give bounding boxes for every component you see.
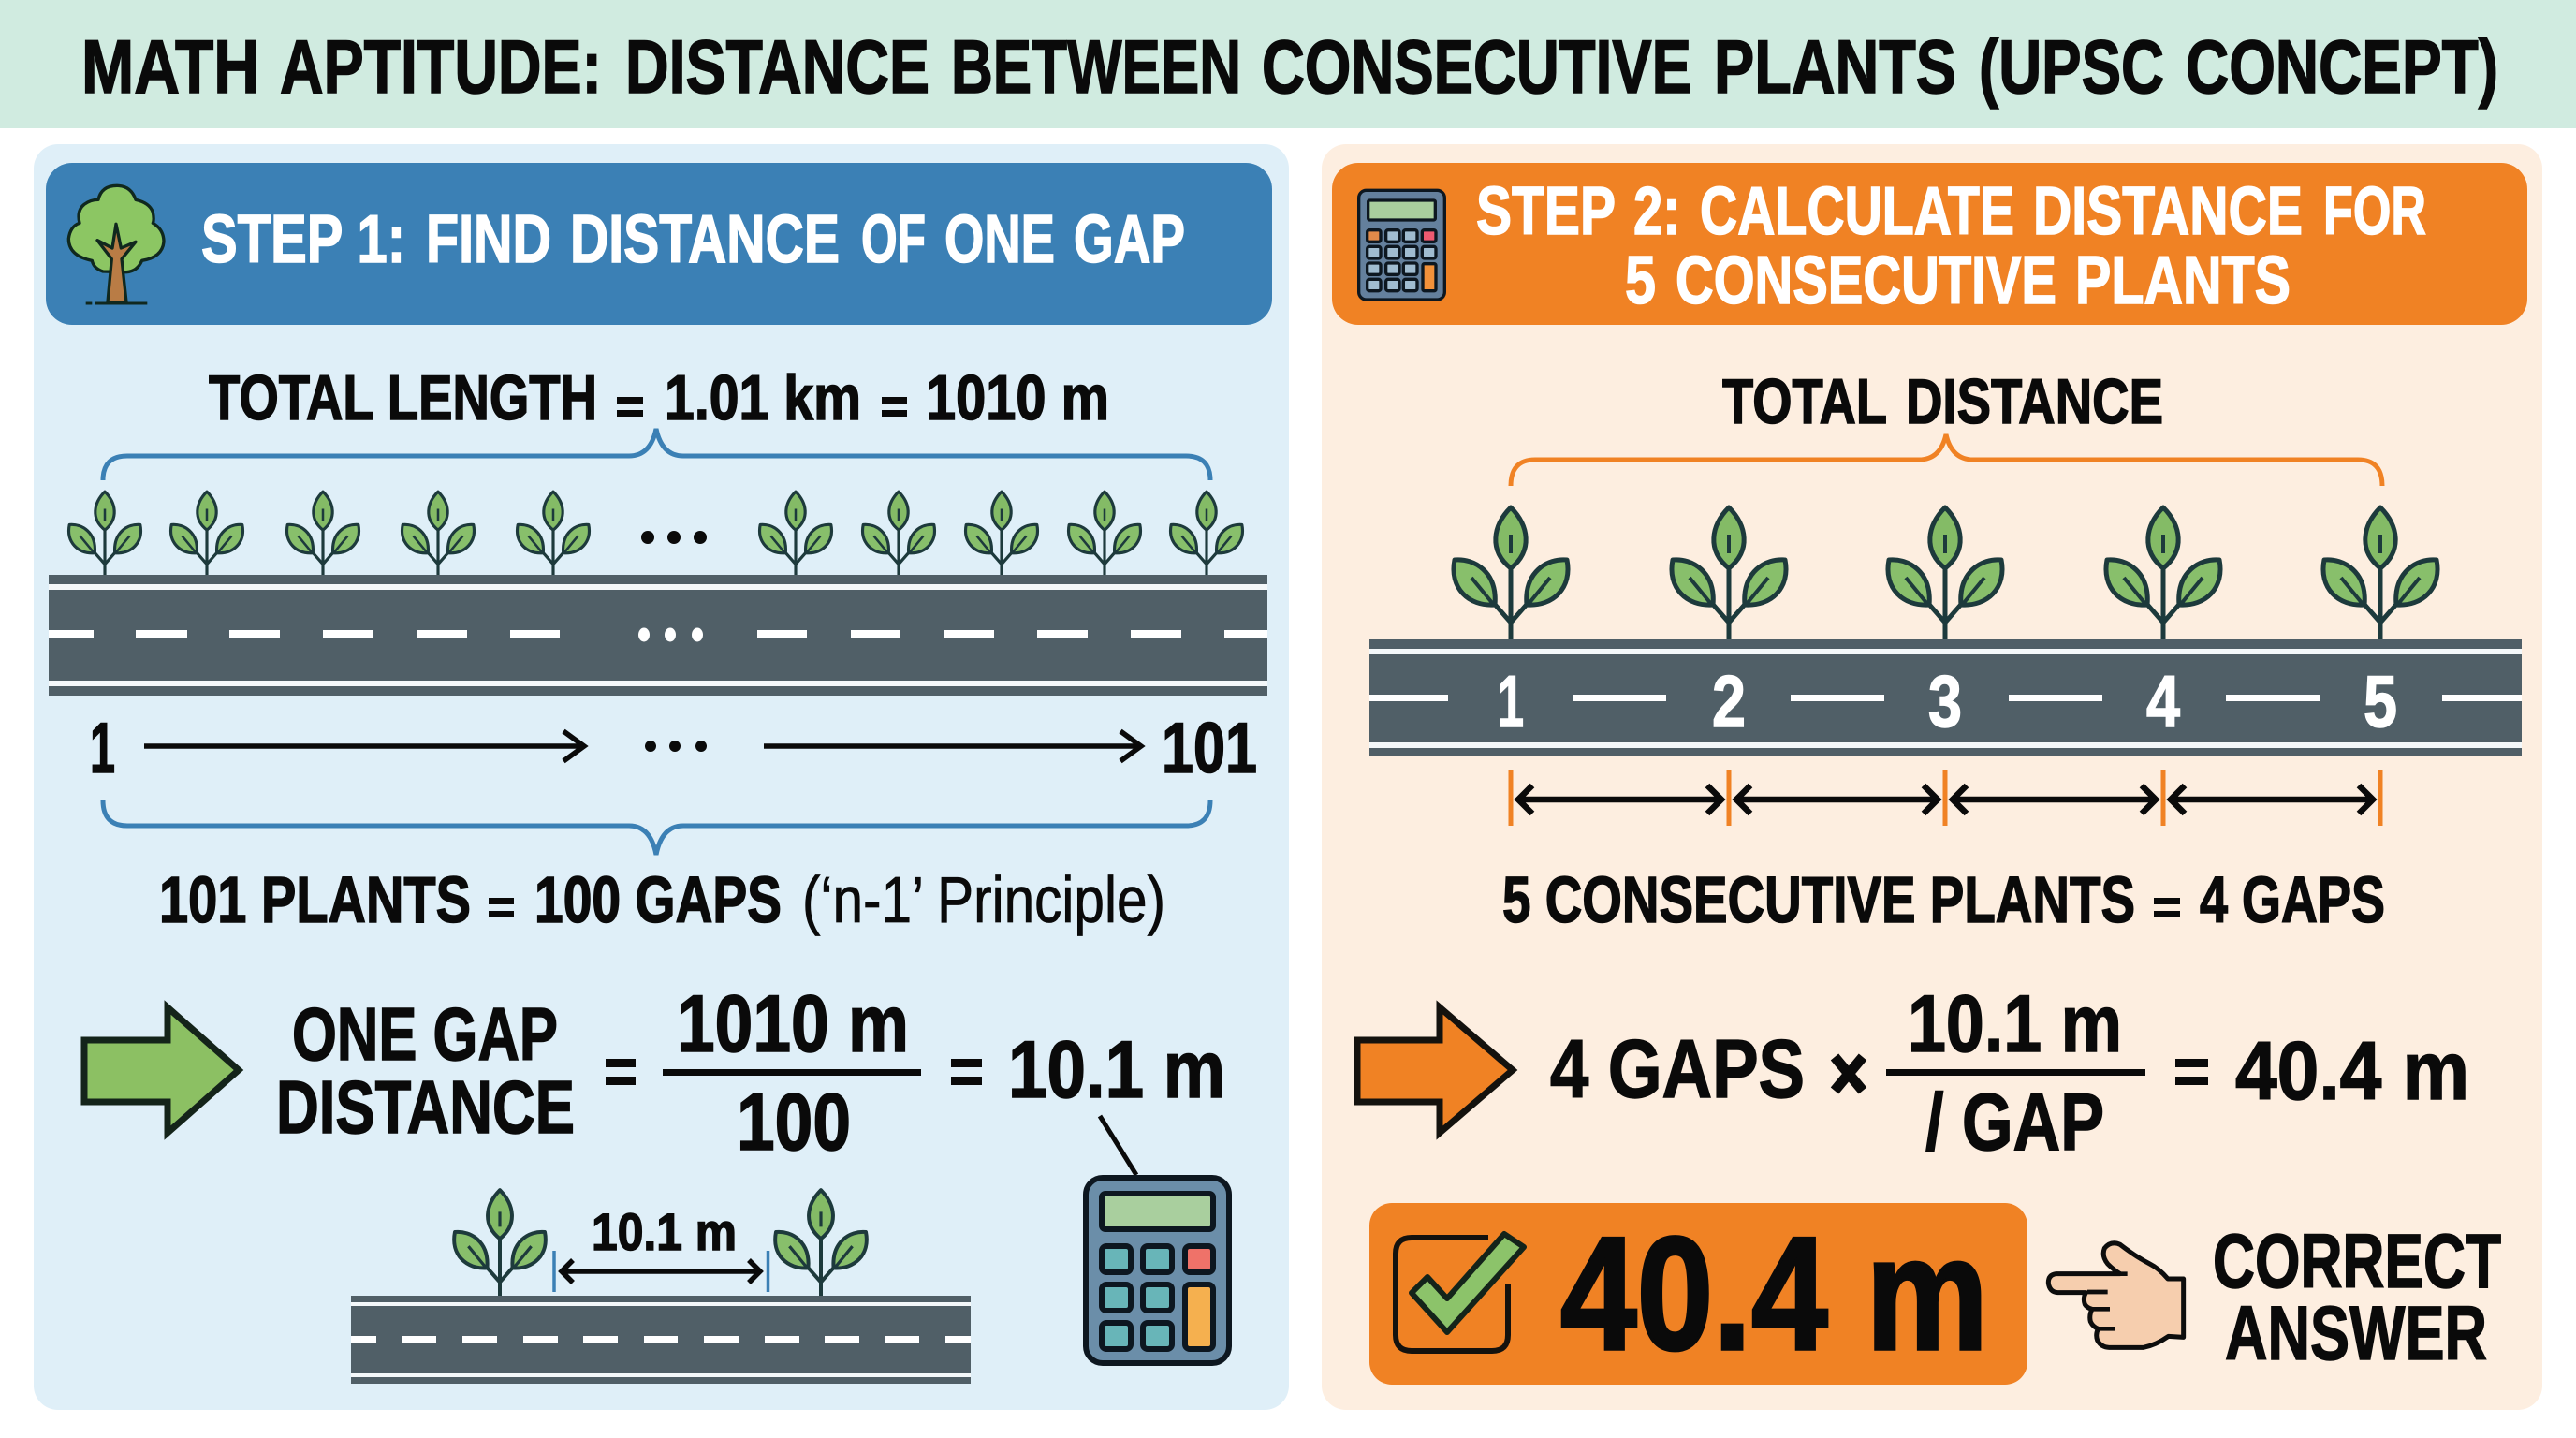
total length label: 1.01 km bbox=[665, 362, 861, 433]
n-1 principle statement: 101 PLANTS bbox=[159, 863, 471, 936]
n-1 principle statement: 100 GAPS bbox=[534, 863, 782, 936]
total length label bbox=[209, 362, 1109, 433]
gap illustration bbox=[351, 1190, 971, 1384]
title banner: PLANTS bbox=[1714, 25, 1956, 110]
gap distance label: 10.1 m bbox=[592, 1202, 737, 1261]
panel: step 1 bbox=[34, 144, 1289, 1410]
road with numbered plants: 1 bbox=[1498, 660, 1524, 742]
title banner bbox=[0, 0, 2576, 128]
title banner: APTITUDE: bbox=[280, 25, 602, 110]
plant count arrows 1 to 101 bbox=[90, 709, 1257, 788]
step 1 heading: FIND bbox=[426, 202, 551, 277]
title banner: CONCEPT) bbox=[2186, 25, 2498, 110]
icon: calculator bbox=[1086, 1178, 1229, 1363]
step 1 heading: OF bbox=[861, 202, 926, 277]
five plants bbox=[1454, 507, 2437, 639]
n-1 principle statement: (‘n-1’ Principle) bbox=[802, 863, 1165, 936]
title banner: DISTANCE bbox=[625, 25, 929, 110]
step 2 heading: DISTANCE bbox=[2033, 174, 2303, 249]
correct answer label: ANSWER bbox=[2225, 1291, 2487, 1376]
formula: one gap distance: 100 bbox=[737, 1078, 851, 1167]
formula: four gaps: 4 GAPS bbox=[1550, 1022, 1805, 1115]
step 2 heading: CALCULATE bbox=[1700, 174, 2014, 249]
formula: one gap distance: DISTANCE bbox=[276, 1065, 575, 1149]
road with numbered plants: 4 bbox=[2146, 660, 2180, 742]
step 1 heading bbox=[201, 202, 1185, 277]
road with numbered plants bbox=[1369, 639, 2522, 756]
plant count arrows 1 to 101: 1 bbox=[90, 709, 115, 788]
step 2 heading: 2: bbox=[1633, 174, 1680, 249]
icon: header calculator bbox=[1359, 190, 1444, 300]
plant count arrows 1 to 101: 101 bbox=[1162, 709, 1257, 788]
total distance label: DISTANCE bbox=[1906, 366, 2163, 437]
gap measurement arrows bbox=[1511, 770, 2380, 826]
top brace bbox=[103, 429, 1210, 480]
arrow: green bbox=[84, 1007, 239, 1133]
road with 101 plants bbox=[49, 575, 1267, 696]
n-1 principle statement bbox=[159, 863, 1165, 936]
bottom brace bbox=[103, 800, 1210, 855]
step 1 heading: ONE bbox=[944, 202, 1055, 277]
answer value: 40.4 m bbox=[1560, 1204, 1988, 1384]
road with numbered plants: 5 bbox=[2364, 660, 2397, 742]
title banner: (UPSC bbox=[1979, 25, 2164, 110]
icon: pointing hand bbox=[2048, 1243, 2184, 1347]
step 2 header bar bbox=[1332, 163, 2527, 325]
formula: four gaps: 10.1 m bbox=[1908, 979, 2122, 1069]
title banner: CONSECUTIVE bbox=[1262, 25, 1691, 110]
consecutive plants statement: 5 CONSECUTIVE PLANTS bbox=[1502, 863, 2135, 936]
arrow: orange bbox=[1357, 1007, 1513, 1133]
formula: one gap distance: ONE GAP bbox=[292, 992, 558, 1076]
step 1 heading: STEP 1: bbox=[201, 202, 405, 277]
formula: one gap distance: 1010 m bbox=[677, 979, 909, 1069]
total distance brace bbox=[1511, 434, 2382, 486]
consecutive plants statement: 4 GAPS bbox=[2200, 863, 2385, 936]
step 2 heading: 5 bbox=[1625, 243, 1656, 318]
row of plants bbox=[69, 492, 1242, 575]
icon: check mark bbox=[1396, 1234, 1524, 1351]
formula: four gaps bbox=[1550, 979, 2469, 1167]
step 2 heading: FOR bbox=[2323, 174, 2426, 249]
step 1 heading: DISTANCE bbox=[570, 202, 840, 277]
pointer line to calculator bbox=[1100, 1116, 1136, 1175]
step 2 heading bbox=[1476, 174, 2426, 318]
formula: one gap distance bbox=[276, 979, 1225, 1167]
formula: one gap distance: 10.1 m bbox=[1008, 1025, 1225, 1115]
panel: step 2 bbox=[1322, 144, 2542, 1410]
title banner: BETWEEN bbox=[951, 25, 1241, 110]
road with numbered plants: 2 bbox=[1712, 660, 1746, 742]
total distance label bbox=[1722, 366, 2163, 437]
title banner: MATH bbox=[81, 25, 259, 110]
step 2 heading: CONSECUTIVE bbox=[1676, 243, 2056, 318]
formula: four gaps: 40.4 m bbox=[2235, 1024, 2469, 1117]
step 2 heading: STEP bbox=[1476, 174, 1616, 249]
icon: tree bbox=[68, 185, 164, 303]
step 1 heading: GAP bbox=[1074, 202, 1185, 277]
answer box bbox=[1369, 1203, 2027, 1385]
total length label: 1010 m bbox=[926, 362, 1109, 433]
formula: four gaps: / GAP bbox=[1925, 1078, 2104, 1167]
total distance label: TOTAL bbox=[1722, 366, 1887, 437]
step 1 header bar bbox=[46, 163, 1272, 325]
correct answer label bbox=[2213, 1219, 2501, 1376]
step 2 heading: PLANTS bbox=[2075, 243, 2291, 318]
total length label: TOTAL LENGTH bbox=[209, 362, 597, 433]
road with numbered plants: 3 bbox=[1928, 660, 1962, 742]
